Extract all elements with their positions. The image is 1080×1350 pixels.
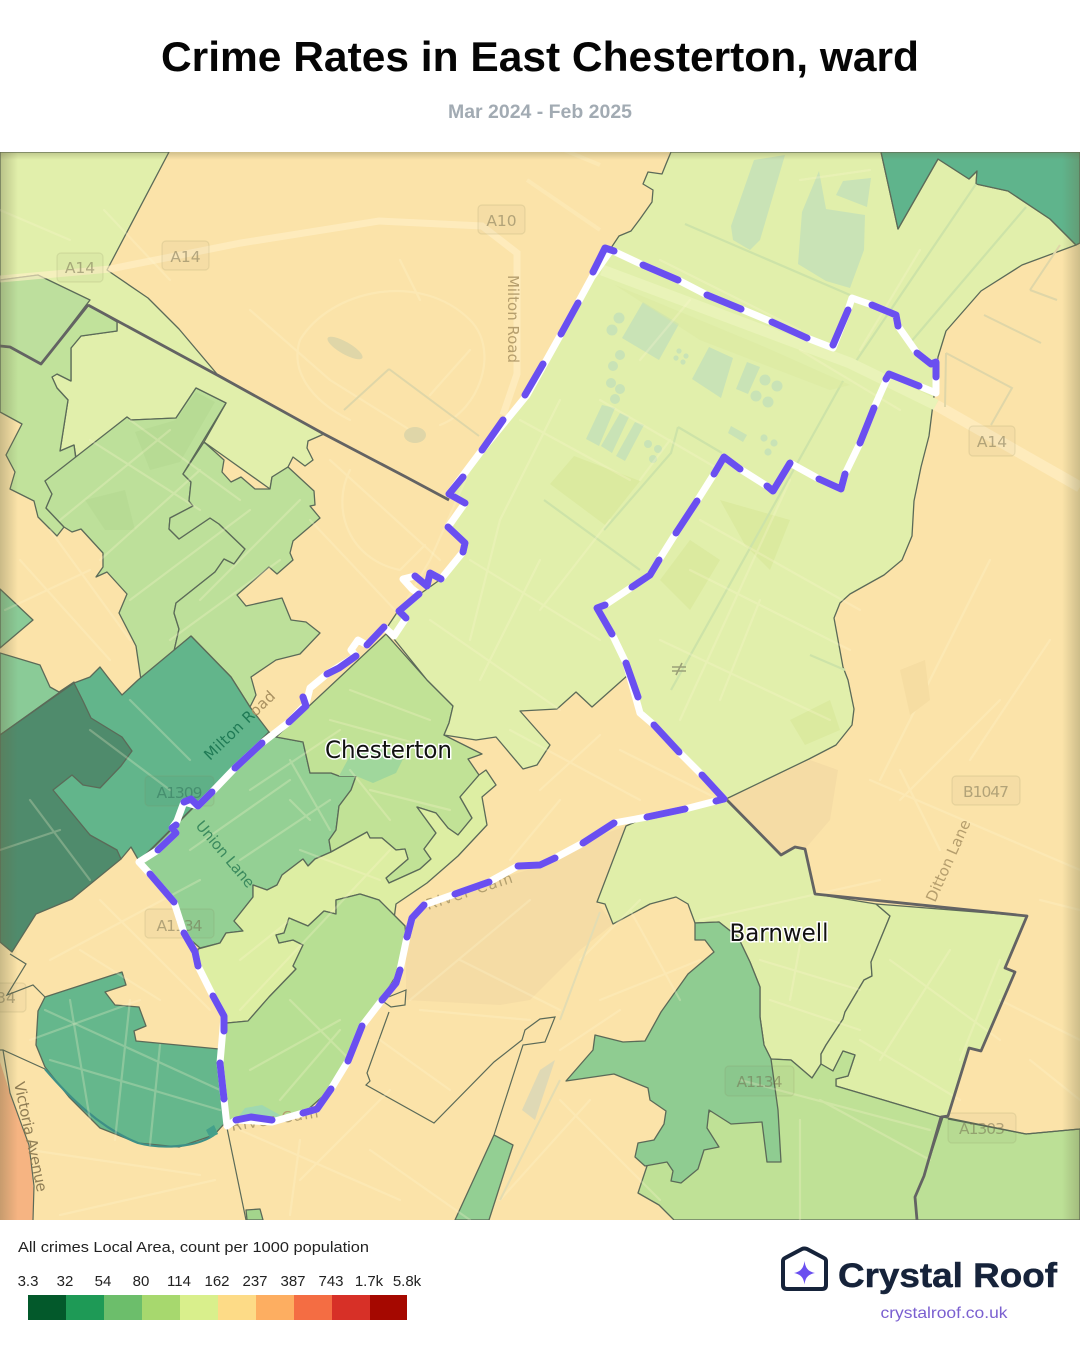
badge: A1309: [145, 776, 214, 806]
area: dark green high-contrast neighbourhood: [0, 683, 132, 952]
area: Chesterton green neighbourhood: [276, 634, 482, 883]
legend scale values: 80: [133, 1273, 149, 1290]
badge: A1134 west: [145, 909, 214, 938]
legend scale values: 54: [95, 1273, 111, 1290]
icon: house with star: [783, 1248, 826, 1289]
area: Union Lane neighbourhood: [139, 732, 356, 948]
legend scale values: 387: [280, 1273, 306, 1290]
area: large green north-west neighbourhood: [45, 388, 245, 680]
area: central lime neighbourhood: [198, 770, 496, 1023]
badge: A1134 west: A1134: [156, 917, 202, 935]
label: Milton Road south: Milton Road: [200, 687, 279, 764]
road number badges: [0, 205, 1020, 1143]
legend colour bar: [28, 1295, 407, 1320]
thin boundary lines: [0, 954, 1080, 1220]
badge: A14 west: [57, 253, 103, 282]
thick district boundary: [0, 305, 1027, 1220]
legend scale values: [18, 1273, 422, 1290]
label: River Cam south: River Cam: [230, 1103, 320, 1135]
badge: A1134 east: [725, 1066, 794, 1096]
legend title: All crimes Local Area, count per 1000 population: [18, 1239, 369, 1256]
title: Crime Rates in East Chesterton, ward: [161, 33, 919, 80]
legend scale values: 743: [318, 1273, 344, 1290]
water bodies and works inside ward: [586, 155, 871, 463]
darker tan: common land south of river: [406, 826, 626, 1005]
area: west edge green: [0, 589, 33, 648]
area: green north-west neighbourhood, east branch: [169, 442, 320, 707]
badge: A14 east: A14: [977, 433, 1007, 451]
area: far south-east green: [915, 1117, 1080, 1220]
badge: A1309: A1309: [156, 784, 202, 802]
badge: A1134 cut off: [0, 983, 26, 1012]
area: Barnwell east lime: [821, 904, 1027, 1117]
badge: A14: A14: [170, 248, 201, 266]
label: Victoria Avenue: Victoria Avenue: [10, 1080, 51, 1193]
map panel: [0, 140, 1080, 1220]
legend scale values: 3.3: [18, 1273, 38, 1290]
wordmark: Crystal Roof: [838, 1257, 1058, 1295]
area: west green band: [0, 305, 117, 536]
logo: Crystal Roof: [783, 1248, 1058, 1322]
icon: railway station: [672, 663, 686, 675]
map edge shadow: [0, 152, 1080, 1220]
ward outline: white base: [139, 250, 936, 1126]
area: teal north-east corner: [881, 152, 1080, 245]
legend scale values: 5.8k: [393, 1273, 422, 1290]
orange area: Victoria Avenue: [0, 1062, 34, 1220]
badge: B1047: B1047: [963, 783, 1009, 801]
badge: A1303: A1303: [959, 1120, 1005, 1138]
area: Chesterton river green neighbourhood: [220, 894, 406, 1126]
label: Milton Road north: Milton Road: [504, 275, 522, 363]
label: River Cam north: River Cam: [424, 869, 515, 914]
area: south green strip: [455, 1135, 513, 1220]
label: Chesterton: Chesterton: [325, 736, 452, 764]
legend scale values: 162: [204, 1273, 230, 1290]
area: Barnwell south green neighbourhood: [566, 922, 781, 1183]
label: Ditton Lane: Ditton Lane: [922, 817, 974, 905]
legend scale values: 114: [167, 1273, 191, 1290]
legend scale values: 32: [57, 1273, 73, 1290]
area: north-west green block: [0, 275, 90, 364]
area: teal neighbourhood: [0, 636, 269, 861]
badge: A14 west: A14: [65, 259, 95, 277]
subtitle: date range: Mar 2024 - Feb 2025: [448, 102, 632, 123]
area: East Chesterton ward lime: [386, 152, 1076, 799]
road network: [0, 140, 1080, 1220]
label: Barnwell: Barnwell: [730, 919, 828, 947]
website url: crystalroof.co.uk: [880, 1305, 1009, 1322]
badge: B1047: [952, 776, 1020, 805]
ward outline: purple dashes: [150, 248, 936, 1120]
label: Union Lane: Union Lane: [192, 817, 258, 891]
area: Barnwell north lime: [597, 799, 890, 1078]
area: south-west teal neighbourhood: [36, 972, 224, 1147]
legend scale values: 237: [242, 1273, 268, 1290]
area: north-west lime: [0, 152, 324, 489]
legend scale values: 1.7k: [355, 1273, 384, 1290]
badge: A10: A10: [486, 212, 517, 230]
badge: A14: [162, 241, 209, 270]
street labels: [10, 275, 974, 1193]
grey tracks on tan: [344, 245, 1060, 436]
legend: [18, 1239, 422, 1320]
badge: A14 east: [969, 426, 1015, 456]
area: south-east green neighbourhood: [638, 1051, 941, 1220]
badge: A1134 east: A1134: [736, 1073, 782, 1091]
badge: A1303: [948, 1113, 1016, 1143]
badge: A10: [478, 205, 525, 234]
